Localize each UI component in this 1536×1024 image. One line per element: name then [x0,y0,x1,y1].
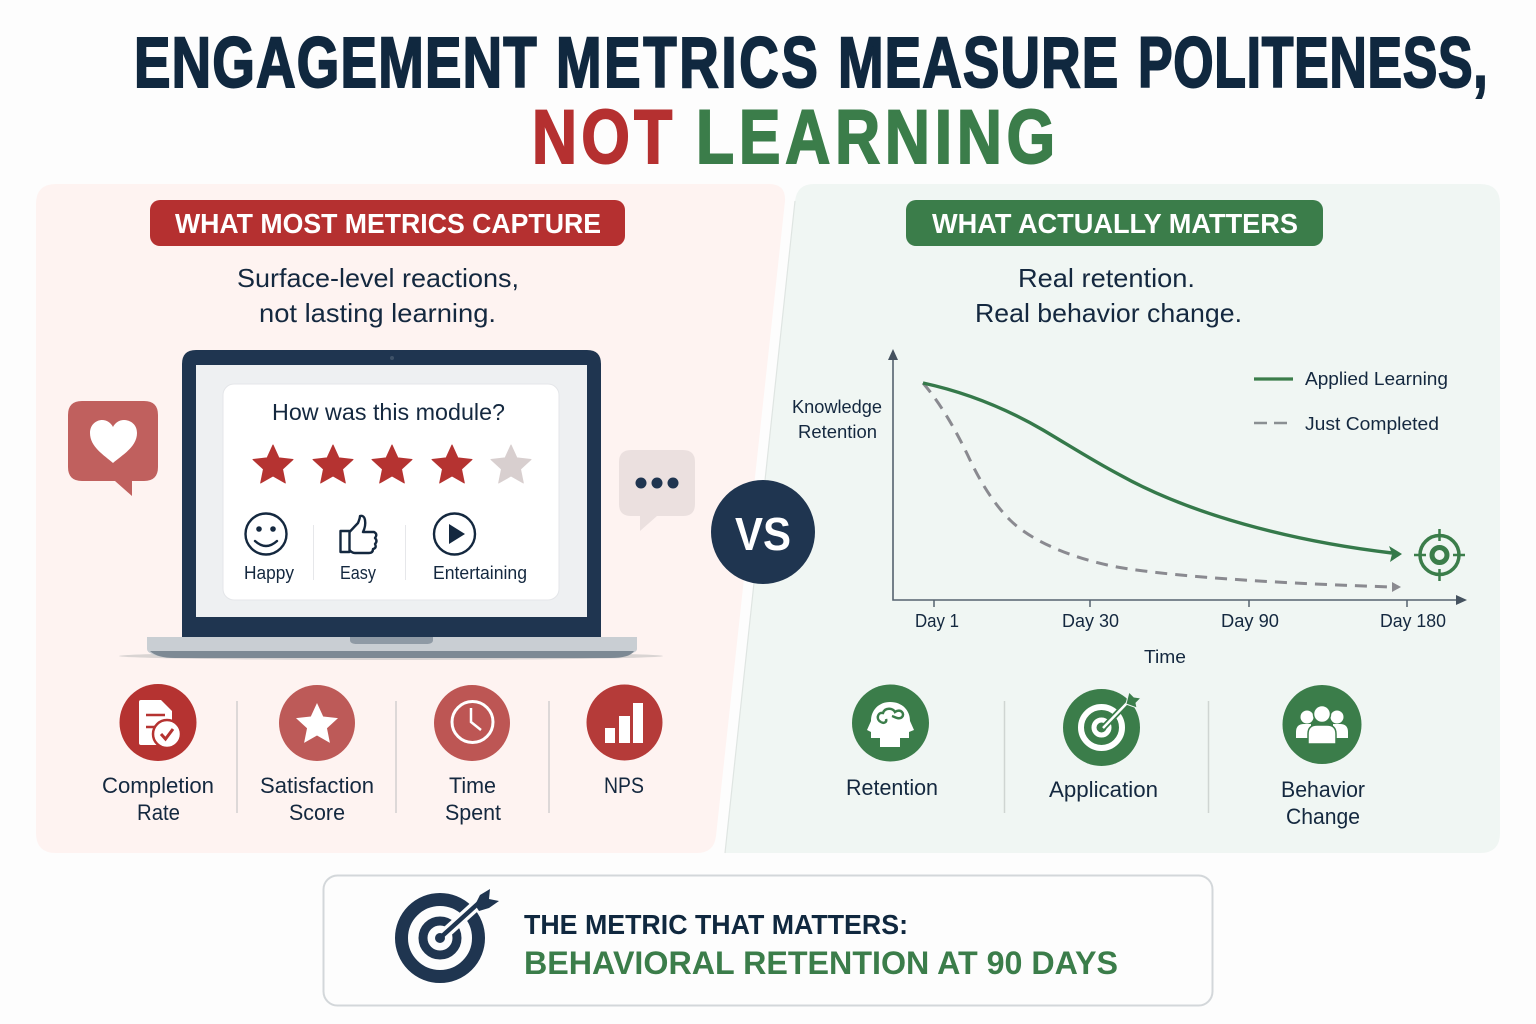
metric: satisfaction score: Satisfaction [260,773,374,798]
survey labels: Easy [340,563,376,583]
panel: what most metrics capture [36,184,785,853]
survey card [223,384,559,600]
VS badge: VS [735,508,791,560]
callout text: BEHAVIORAL RETENTION AT 90 DAYS [524,945,1118,981]
metric: completion rate: Completion [102,773,214,798]
metric: NPS [586,684,662,798]
metric: time spent: Spent [445,800,501,825]
icon: thumbs up [340,516,376,553]
x-axis labels [915,611,1446,667]
metric: satisfaction score: Score [289,800,345,825]
title: POLITENESS, [1138,24,1488,103]
title: LEARNING [696,94,1055,179]
survey labels: Entertaining [433,563,527,583]
icon: target endpoint [1414,529,1465,581]
callout text: THE METRIC THAT MATTERS: [524,909,908,940]
legend [1254,369,1448,434]
subheading: real retention: Real behavior change. [975,298,1242,328]
x-axis labels: Time [1144,647,1186,667]
legend: Just Completed [1305,414,1439,434]
heading pill: what most metrics capture: WHAT MOST METRICS CAPTURE [175,208,601,239]
metric: completion rate [102,684,214,825]
icon: smiley [246,514,286,554]
metric: behavior change: Behavior [1281,777,1365,802]
title: METRICS [556,24,818,103]
callout: the metric that matters [324,876,1212,1006]
laptop with survey [119,350,663,660]
x-axis labels: Day 180 [1380,611,1446,631]
subheading: surface-level reactions: not lasting learning. [259,298,496,328]
metric: satisfaction score [260,685,374,825]
legend: Applied Learning [1305,369,1448,389]
line chart: knowledge retention over time [792,349,1467,667]
title: ENGAGEMENT [134,24,537,103]
survey labels: Happy [244,563,294,583]
heading pill: what actually matters [906,200,1323,246]
y-axis label [792,397,882,442]
panel: what actually matters [725,184,1500,853]
subheading: real retention: Real retention. [1018,263,1195,293]
metric: application: Application [1049,777,1158,802]
title: MEASURE [838,24,1118,103]
metric: retention [846,684,938,800]
metric: retention: Retention [846,775,938,800]
icon: heart speech bubble [68,401,158,496]
icon: typing speech bubble [619,450,695,531]
survey card: How was this module? [272,399,505,425]
y-axis label: Knowledge [792,397,882,417]
x-axis labels: Day 30 [1062,611,1119,631]
icon: target with arrow [402,889,499,976]
y-axis label: Retention [798,422,877,442]
metric: behavior change [1281,685,1365,829]
subheading: real retention [975,263,1242,328]
metric: behavior change: Change [1286,804,1360,829]
metric: application [1049,689,1158,802]
subheading: surface-level reactions [237,263,519,328]
title: NOT [532,94,672,179]
heading pill: what most metrics capture [150,200,625,246]
callout text [524,909,1118,981]
heading pill: what actually matters: WHAT ACTUALLY MATTERS [932,208,1298,239]
metric: completion rate: Rate [137,800,180,825]
title [134,24,1488,179]
icon: play button [434,514,475,554]
metric: NPS: NPS [604,773,644,798]
chart axes [888,349,1467,607]
x-axis labels: Day 90 [1221,611,1279,631]
subheading: surface-level reactions: Surface-level reactions, [237,263,519,293]
metric: time spent [434,685,510,825]
line: just completed [923,383,1401,592]
metric: time spent: Time [449,773,496,798]
x-axis labels: Day 1 [915,611,959,631]
line: applied learning [923,383,1402,562]
star rating [253,445,531,483]
survey labels [244,563,527,583]
VS badge [711,480,815,584]
